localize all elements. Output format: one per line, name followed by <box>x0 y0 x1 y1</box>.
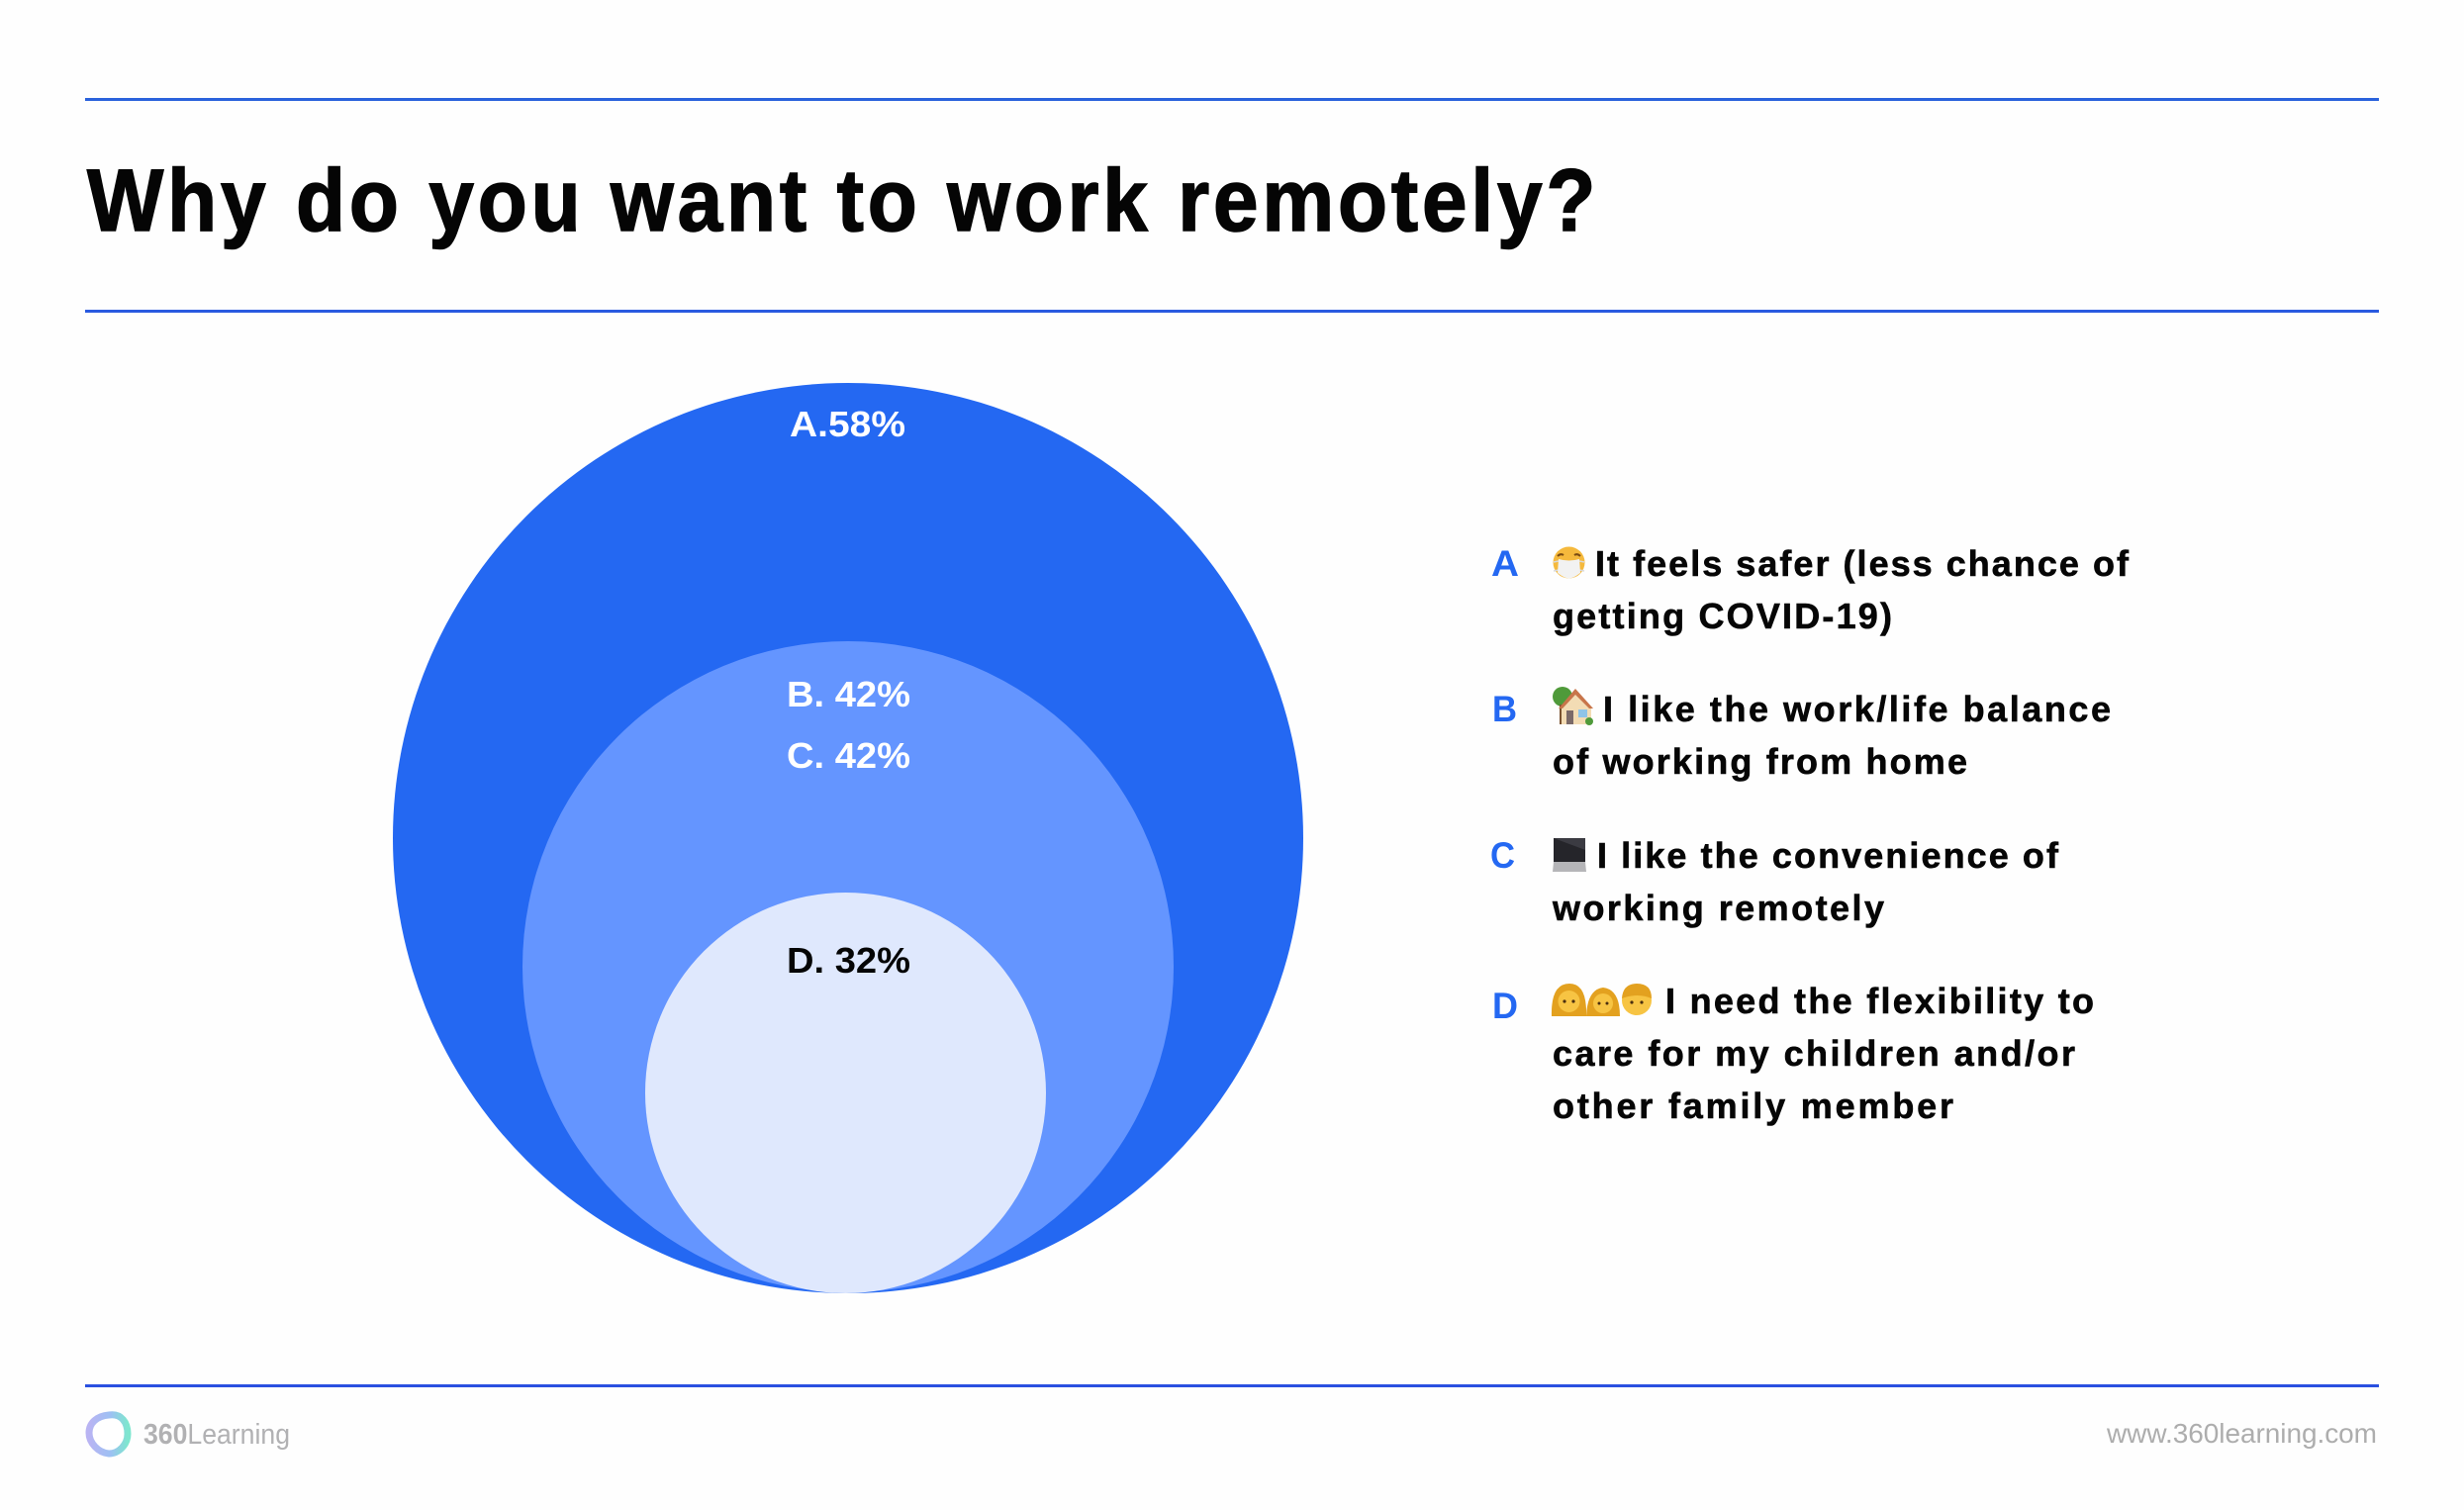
text line 1: I like the work/life balance <box>1603 689 2111 729</box>
logo: 360Learning <box>89 1415 290 1454</box>
title rule <box>85 310 2379 313</box>
label D: D. 32% <box>787 940 910 981</box>
letter A: A <box>1491 543 1519 584</box>
circle B and C: 42% <box>522 641 1174 1292</box>
label C: C. 42% <box>787 735 910 776</box>
icon: laptop <box>1553 838 1586 872</box>
label A: A.58% <box>790 404 905 444</box>
footer rule <box>85 1384 2379 1387</box>
nested circle chart <box>393 383 1303 1293</box>
text line 2: getting COVID-19) <box>1553 596 1892 636</box>
letter D: D <box>1492 986 1518 1026</box>
icon: family faces <box>1552 984 1652 1016</box>
text line 3: other family member <box>1553 1085 1953 1126</box>
text line 2: care for my children and/or <box>1553 1033 2075 1074</box>
letter C: C <box>1490 835 1515 876</box>
text line 1: It feels safer (less chance of <box>1595 543 2130 584</box>
text line 1: I like the convenience of <box>1597 835 2059 876</box>
wordmark: 360Learning <box>143 1419 290 1451</box>
legend item B <box>1492 687 2111 782</box>
text line 1: I need the flexibility to <box>1665 981 2094 1021</box>
text line 2: of working from home <box>1553 741 1967 782</box>
legend item C <box>1490 835 2059 928</box>
legend <box>1490 543 2130 1126</box>
circle A: 58% <box>393 383 1303 1293</box>
circle D: 32% <box>645 893 1046 1293</box>
label B: B. 42% <box>787 674 910 714</box>
icon: house with garden <box>1553 687 1593 725</box>
title: Why do you want to work remotely? <box>87 152 1595 250</box>
top rule <box>85 98 2379 101</box>
website url: www.360learning.com <box>2106 1418 2377 1449</box>
letter B: B <box>1492 689 1517 729</box>
legend item D <box>1492 981 2094 1126</box>
text line 2: working remotely <box>1552 888 1884 928</box>
legend item A <box>1491 543 2130 636</box>
icon: face with medical mask <box>1554 546 1585 578</box>
icon: logo ring <box>89 1415 128 1454</box>
